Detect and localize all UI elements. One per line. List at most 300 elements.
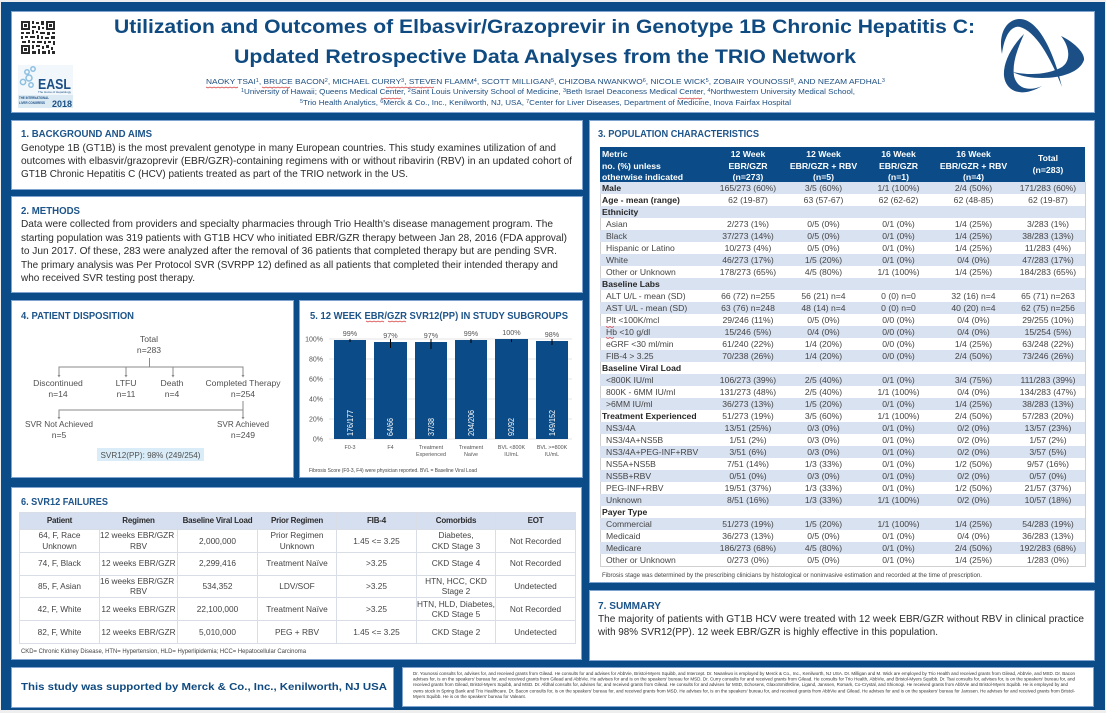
- table: population characteristics: 0/2 (0%): [957, 447, 990, 457]
- table: failures: Patient: [47, 516, 72, 525]
- panel: funding: [12, 668, 393, 707]
- table: population characteristics: 0/5 (0%): [807, 531, 840, 541]
- table: failures: CKD Stage 3: [432, 541, 480, 551]
- affiliations: 2: [408, 88, 411, 94]
- text: methods: who received SVR testing post therapy.: [20, 272, 195, 284]
- table: population characteristics: AST U/L - mean (SD): [606, 303, 687, 313]
- table: population characteristics: 0/4 (0%): [807, 327, 840, 337]
- bar chart: BVL >=800K: [537, 445, 568, 451]
- table: population characteristics: 0/5 (0%): [807, 243, 840, 253]
- table: failures: 2,299,416: [199, 558, 236, 568]
- table: population characteristics: 62 (19-87): [1028, 195, 1068, 205]
- panel: disclosures: [403, 668, 1093, 706]
- table: population characteristics: 192/283 (68%): [1020, 543, 1076, 553]
- table: population characteristics: 46/273 (17%): [722, 255, 774, 265]
- table: population characteristics: 1/5 (20%): [805, 399, 842, 409]
- bar chart: 92/92: [506, 418, 516, 436]
- heading: methods: 2. METHODS: [21, 205, 80, 217]
- table: failures: 534,352: [202, 581, 232, 591]
- table: population characteristics: 10/57 (18%): [1025, 495, 1071, 505]
- bar chart: 100%: [305, 336, 323, 344]
- flow diagram: LTFU: [116, 378, 136, 388]
- table: population characteristics: 1/1 (100%): [877, 267, 920, 277]
- table: population characteristics: 111/283 (39%): [1020, 375, 1076, 385]
- authors: , AND NEZAM AFDHAL: [794, 77, 882, 86]
- table: population characteristics: 0/1 (0%): [882, 435, 915, 445]
- table: population characteristics: 62 (62-62): [879, 195, 918, 205]
- table: population characteristics: 0/1 (0%): [882, 471, 915, 481]
- table: failures: Not Recorded: [510, 536, 561, 546]
- authors: , STEVEN FLAMM: [404, 77, 474, 86]
- table: population characteristics: 0/57 (0%): [1029, 471, 1067, 481]
- table: failures: HTN, HCC, CKD: [425, 576, 487, 586]
- table: population characteristics: 9/57 (16%): [1027, 459, 1069, 469]
- bar chart: 99%: [343, 329, 358, 338]
- table: failures: 12 weeks EBR/GZR: [101, 627, 176, 637]
- table: population characteristics: Asian: [606, 219, 628, 229]
- affiliations: 6: [380, 99, 383, 105]
- table: population characteristics: 1/1 (100%): [877, 183, 920, 193]
- table: population characteristics: 1/5 (20%): [805, 255, 842, 265]
- table: population characteristics: 51/273 (19%): [722, 519, 774, 529]
- authors: , CHIZOBA NWANKWO: [554, 77, 643, 86]
- table: population characteristics: 62 (75) n=256: [1021, 303, 1075, 313]
- table: population characteristics: 62 (48-85): [954, 195, 993, 205]
- chart footnote: Fibrosis Score (F0-3, F4) were physician reported. BVL = Baseline Viral Load: [309, 468, 477, 474]
- table: population characteristics: Black: [606, 231, 627, 241]
- table: population characteristics: 48 (14) n=4: [801, 303, 846, 313]
- heading: background and aims: 1. BACKGROUND AND AIMS: [21, 128, 152, 140]
- table: population characteristics: 2/4 (50%): [955, 411, 992, 421]
- table: population characteristics: 70/238 (26%): [722, 351, 774, 361]
- table: population characteristics: 37/273 (14%): [722, 231, 774, 241]
- authors: NAOKY TSAI: [206, 77, 251, 86]
- table: population characteristics: Hispanic or Latino: [606, 243, 675, 253]
- table: population characteristics: EBR/GZR + RBV: [940, 161, 1007, 171]
- bar chart: Experienced: [416, 452, 446, 458]
- flow diagram: n=11: [117, 389, 136, 399]
- table: population characteristics: 0/2 (0%): [957, 423, 990, 433]
- table: failures: CKD Stage 4: [432, 558, 480, 568]
- table: failures: Not Recorded: [510, 558, 561, 568]
- table: population characteristics: 38/283 (13%): [1022, 231, 1074, 241]
- table: population characteristics: 2/5 (40%): [805, 375, 842, 385]
- table: population characteristics: <800K IU/ml: [606, 375, 654, 385]
- bar chart: Naïve: [464, 452, 478, 458]
- table: population characteristics: PEG-INF+RBV: [606, 483, 664, 493]
- table: failures: Comorbids: [436, 516, 476, 525]
- bar chart: 149/152: [547, 410, 557, 436]
- table: population characteristics: 47/283 (17%): [1022, 255, 1074, 265]
- text: summary: The majority of patients with GT1B HCV were treated with 12 week EBR/GZR without RBV in clinical practice: [598, 613, 1084, 625]
- table: population characteristics: EBR/GZR: [879, 161, 918, 171]
- footnote: abbreviations: CKD= Chronic Kidney Disease, HTN= Hypertension, HLD= Hyperlipidemia; HCC= Hepatocellular Carcinoma: [21, 649, 307, 655]
- QR code: [21, 21, 55, 54]
- table: population characteristics: Commercial: [606, 519, 652, 529]
- table: population characteristics: 184/283 (65%): [1020, 267, 1076, 277]
- text: disclosures: advises for, is on the speakers' bureau for, and received grants from Gilead and AbbVie. He advises for and is on the speakers' bureau for MSD. Dr. Curry consults for and received grants from Gilead. He consults for Trio Health, AbbVie, and Bristol-Myers Squibb. Dr. Tsai consults for, advises for, is on the speakers' bureau for, and: [413, 676, 1075, 682]
- table: population characteristics: 0/4 (0%): [957, 315, 990, 325]
- table: failures: 64, F, Race: [39, 530, 80, 540]
- table: population characteristics: EBR/GZR: [728, 161, 768, 171]
- table: population characteristics: 3/57 (5%): [1029, 447, 1067, 457]
- table: population characteristics: 16 Week: [881, 149, 916, 159]
- bar chart: 0%: [313, 436, 323, 444]
- table: population characteristics: 0/1 (0%): [882, 423, 915, 433]
- heading: population characteristics: 3. POPULATION CHARACTERISTICS: [598, 128, 759, 140]
- table: population characteristics: 0/4 (0%): [957, 255, 990, 265]
- authors: 4: [474, 78, 477, 84]
- table: failures: Undetected: [514, 581, 557, 591]
- bar chart: 176/177: [345, 410, 355, 436]
- footnote: fibrosis stage: Fibrosis stage was determined by the prescribing clinicians by histological or noninvasive estimation and recorded at the time of prescription.: [602, 572, 982, 579]
- table: population characteristics: 0/3 (0%): [807, 471, 840, 481]
- table: population characteristics: 15/254 (5%): [1025, 327, 1071, 337]
- table: population characteristics: Treatment Experienced: [602, 411, 697, 421]
- bar chart: 100%: [502, 328, 521, 337]
- table: population characteristics: 63 (57-67): [804, 195, 843, 205]
- table: population characteristics: Hb <10 g/dl: [606, 327, 650, 337]
- table: population characteristics: Baseline Labs: [602, 279, 660, 289]
- table: population characteristics: 32 (16) n=4: [951, 291, 996, 301]
- authors: 5: [551, 78, 554, 84]
- table: failures: Unknown: [280, 541, 314, 551]
- table: population characteristics: 19/51 (37%): [725, 483, 771, 493]
- bar chart: F4: [387, 445, 394, 451]
- table: population characteristics: Medicare: [606, 543, 641, 553]
- table: population characteristics: 1/1 (100%): [877, 387, 920, 397]
- table: population characteristics: 1/4 (25%): [955, 267, 992, 277]
- table: population characteristics: Other or Unknown: [606, 267, 676, 277]
- table: population characteristics: 11/283 (4%): [1025, 243, 1071, 253]
- table: population characteristics: ALT U/L - mean (SD): [606, 291, 686, 301]
- table: failures: Prior Regimen: [270, 530, 324, 540]
- text: methods: to Jun 2017. Of these, 283 were analyzed after the removal of 36 patients that completed therapy but are pending SVR.: [21, 245, 557, 257]
- table: population characteristics: 0/1 (0%): [882, 531, 915, 541]
- affiliations: 5: [300, 99, 303, 105]
- bar chart: Treatment: [419, 445, 444, 451]
- table: population characteristics: 1/4 (25%): [955, 519, 992, 529]
- text: disclosures: [413, 671, 1075, 699]
- table: population characteristics: 73/246 (26%): [1022, 351, 1074, 361]
- table: failures: RBV: [130, 541, 147, 551]
- table: population characteristics: 36/273 (13%): [722, 531, 774, 541]
- flow diagram: Completed Therapy: [206, 378, 281, 388]
- table: population characteristics: 1/1 (100%): [877, 519, 920, 529]
- table: population characteristics: 0/0 (0%): [882, 339, 915, 349]
- table: failures: 12 weeks EBR/GZR: [101, 604, 176, 614]
- table: failures: >3.25: [366, 581, 387, 591]
- panel: SVR12 failures: [12, 488, 581, 659]
- flow diagram: Discontinued: [33, 378, 83, 388]
- table: failures: EOT: [528, 516, 543, 525]
- table: population characteristics: 131/273 (48%): [720, 387, 776, 397]
- table: population characteristics: 0/1 (0%): [882, 555, 915, 565]
- table: population characteristics: 7/51 (14%): [727, 459, 769, 469]
- text: background: Genotype 1B (GT1B) is the most prevalent genotype in many European countries. This study examines utilization of and: [21, 142, 556, 154]
- table: population characteristics: 38/283 (13%): [1022, 399, 1074, 409]
- table: population characteristics: 61/240 (22%): [722, 339, 774, 349]
- table: failures: CKD Stage 5: [432, 609, 480, 619]
- table: population characteristics: 0/1 (0%): [882, 483, 915, 493]
- table: population characteristics: 0/5 (0%): [807, 231, 840, 241]
- table: population characteristics: 0/1 (0%): [882, 255, 915, 265]
- table: failures: Diabetes,: [438, 530, 474, 540]
- table: population characteristics: 1/4 (25%): [955, 243, 992, 253]
- table: population characteristics: 0/3 (0%): [807, 423, 840, 433]
- bar chart: 64/66: [385, 418, 395, 436]
- table: population characteristics: 8/51 (16%): [727, 495, 769, 505]
- table: failures: HTN, HLD, Diabetes,: [417, 599, 495, 609]
- table: failures: FIB-4: [367, 516, 386, 525]
- table: population characteristics: 0/1 (0%): [882, 219, 915, 229]
- EASL logo: [18, 65, 73, 109]
- text: funding statement: This study was supported by Merck & Co., Inc., Kenilworth, NJ USA: [21, 681, 387, 693]
- bar chart: 60%: [309, 376, 323, 384]
- authors: [206, 77, 885, 86]
- table: population characteristics: 1/1 (100%): [877, 411, 920, 421]
- bar chart: 99%: [464, 329, 479, 338]
- text: methods: Data were collected from providers and specialty pharmacies through Trio Health's disease management program. The: [21, 218, 553, 230]
- affiliations: Trio Health Analytics,: [303, 98, 380, 107]
- table: failures: 1.45 <= 3.25: [353, 627, 400, 637]
- table: population characteristics: 10/273 (4%): [725, 243, 771, 253]
- panel: population characteristics: [590, 121, 1094, 582]
- table: population characteristics: 3/5 (60%): [805, 411, 842, 421]
- table: population characteristics: Ethnicity: [602, 207, 638, 217]
- table: failures: Treatment Naïve: [266, 604, 328, 614]
- table: population characteristics: 0/3 (0%): [807, 435, 840, 445]
- affiliations: Beth Israel Deaconess Medical Center,: [566, 87, 707, 96]
- table: population characteristics: NS3/4A+PEG-INF+RBV: [606, 447, 698, 457]
- authors: 3: [882, 78, 885, 84]
- affiliations: 7: [526, 99, 529, 105]
- table: failures: 82, F, White: [38, 627, 81, 637]
- table: population characteristics: 63 (76) n=248: [721, 303, 775, 313]
- title: Updated Retrospective Data Analyses from the TRIO Network: [234, 47, 856, 68]
- table: population characteristics: 56 (21) n=4: [801, 291, 846, 301]
- EASL logo: The Home of Hepatology: [38, 90, 71, 94]
- table: population characteristics: 0/4 (0%): [957, 387, 990, 397]
- table: population characteristics: 36/273 (13%): [722, 399, 774, 409]
- table: failures: Not Recorded: [510, 604, 561, 614]
- table: population characteristics: 1/3 (33%): [805, 459, 842, 469]
- table: failures: CKD Stage 2: [432, 627, 480, 637]
- table: population characteristics: FIB-4 > 3.25: [606, 351, 654, 361]
- table: population characteristics: (n=4): [963, 172, 984, 182]
- table: population characteristics: 2/4 (50%): [955, 183, 992, 193]
- text: disclosures: received grants from Gilead, Bristol-Myers Squibb, and MSD. Dr. Afdhal consults for, advises for, and received grants from Gilead. He consults for and advises for MSD, Echosens, GlaxoSmithKline, Ligand, Janssen, Romark, Co-Crystal, and Shionogi. He received grants from AbbVie and Bristol-Myers Squibb. He is employed by and: [413, 682, 1068, 687]
- table: population characteristics: 65 (71) n=263: [1021, 291, 1075, 301]
- table: population characteristics: 3/51 (6%): [729, 447, 767, 457]
- panel: patient disposition: [12, 301, 293, 477]
- affiliations: 1: [241, 88, 244, 94]
- table: population characteristics: Other or Unknown: [606, 555, 676, 565]
- table: population characteristics: 0/1 (0%): [882, 447, 915, 457]
- table: population characteristics: 2/4 (50%): [955, 351, 992, 361]
- table: population characteristics: 1/283 (0%): [1027, 555, 1069, 565]
- authors: 3: [401, 78, 404, 84]
- flow diagram: Death: [161, 378, 184, 388]
- text: methods: starting population was 319 patients with GT1B HCV who initiated EBR/GZR therapy between Jan 28, 2016 (FDA approval): [21, 232, 567, 244]
- table: population characteristics: 0/0 (0%): [882, 351, 915, 361]
- bar chart: [305, 328, 572, 458]
- title: Utilization and Outcomes of Elbasvir/Grazoprevir in Genotype 1B Chronic Hepatitis C:: [114, 17, 975, 38]
- table: population characteristics: 165/273 (60%): [720, 183, 776, 193]
- table: population characteristics: 13/57 (23%): [1025, 423, 1071, 433]
- table: failures: Stage 2: [442, 586, 470, 596]
- affiliations: [241, 87, 855, 107]
- table: population characteristics: 1/4 (25%): [955, 399, 992, 409]
- bar chart: 80%: [309, 356, 323, 364]
- affiliations: 3: [563, 88, 566, 94]
- text: methods: [20, 218, 567, 284]
- table: population characteristics: eGRF <30 ml/min: [606, 339, 674, 349]
- table: failures: Unknown: [42, 541, 77, 551]
- table: failures: 1.45 <= 3.25: [353, 536, 400, 546]
- affiliations: Merck & Co., Inc., Kenilworth, NJ, USA,: [383, 98, 526, 107]
- table: population characteristics: 15/246 (5%): [725, 327, 771, 337]
- text: background: GT1B Chronic Hepatitis C (HCV) patients treated as part of the TRIO network in the US.: [21, 168, 408, 180]
- table: failures: 12 weeks EBR/GZR: [101, 558, 176, 568]
- table: population characteristics: 1/51 (2%): [729, 435, 767, 445]
- table: population characteristics: 800K - 6MM IU/ml: [606, 387, 675, 397]
- bar chart: 204/206: [466, 410, 476, 436]
- table: failures: Treatment Naïve: [266, 558, 328, 568]
- table: population characteristics: 0/5 (0%): [807, 219, 840, 229]
- table: population characteristics: 4/5 (80%): [805, 267, 842, 277]
- bar chart: F0-3: [344, 445, 356, 451]
- bar chart: 20%: [309, 416, 323, 424]
- table: population characteristics: no. (%) unless: [602, 161, 661, 171]
- text: background: [21, 142, 572, 180]
- affiliations: Center for Liver Diseases, Department of Medicine, Inova Fairfax Hospital: [529, 98, 791, 107]
- flow diagram: [25, 334, 281, 440]
- table: population characteristics: 40 (20) n=4: [951, 303, 996, 313]
- table: population characteristics: 1/1 (100%): [877, 495, 920, 505]
- table: population characteristics: 54/283 (19%): [1022, 519, 1074, 529]
- table: population characteristics: 178/273 (65%): [720, 267, 776, 277]
- table: population characteristics: 106/273 (39%): [720, 375, 776, 385]
- table: population characteristics: 186/273 (68%): [720, 543, 776, 553]
- flow diagram: n=14: [48, 389, 68, 399]
- table: population characteristics: 13/51 (25%): [725, 423, 771, 433]
- table: population characteristics: 3/4 (75%): [955, 375, 992, 385]
- table: population characteristics: Plt <100K/mcl: [606, 315, 659, 325]
- table: population characteristics: 1/4 (25%): [955, 231, 992, 241]
- bar chart: 98%: [545, 330, 560, 339]
- table: population characteristics: 1/4 (25%): [955, 339, 992, 349]
- table: population characteristics: (n=273): [733, 172, 763, 182]
- table: population characteristics: 66 (72) n=255: [721, 291, 775, 301]
- table: population characteristics: 3/5 (60%): [805, 183, 842, 193]
- table: population characteristics: Baseline Viral Load: [602, 363, 681, 373]
- bar chart: 40%: [309, 396, 323, 404]
- table: population characteristics: White: [606, 255, 628, 265]
- table: population characteristics: 2/5 (40%): [805, 387, 842, 397]
- flow diagram: n=283: [137, 345, 161, 355]
- bar chart: 97%: [383, 331, 398, 340]
- table: population characteristics: 63/248 (22%): [1022, 339, 1074, 349]
- table: failures: 22,100,000: [197, 604, 238, 614]
- flow diagram: n=249: [231, 430, 255, 440]
- heading: patient disposition: 4. PATIENT DISPOSITION: [21, 310, 134, 322]
- table: population characteristics: 1/4 (20%): [805, 339, 842, 349]
- text: background: outcomes with elbasvir/grazoprevir (EBR/GZR)-containing regimens with or without ribavirin (RBV) in an updated cohort of: [21, 155, 572, 167]
- heading: failures: 6. SVR12 FAILURES: [21, 496, 108, 508]
- table: population characteristics: 29/255 (10%): [1022, 315, 1074, 325]
- table: population characteristics: Payer Type: [602, 507, 647, 517]
- table: failures: >3.25: [366, 604, 387, 614]
- callout: SVR12 result: SVR12(PP): 98% (249/254): [100, 450, 201, 460]
- table: population characteristics: 171/283 (60%): [1020, 183, 1076, 193]
- authors: , ZOBAIR YOUNOSSI: [709, 77, 791, 86]
- table: population characteristics: 1/3 (33%): [805, 495, 842, 505]
- table: population characteristics: 0/2 (0%): [957, 495, 990, 505]
- panel: summary: [590, 591, 1094, 660]
- table: population characteristics: 0/1 (0%): [882, 543, 915, 553]
- table: population characteristics: 51/273 (19%): [722, 411, 774, 421]
- authors: , SCOTT MILLIGAN: [477, 77, 551, 86]
- table: failures: Regimen: [122, 516, 155, 525]
- table: failures: Prior Regimen: [271, 516, 323, 525]
- table: population characteristics: 0 (0) n=0: [881, 303, 916, 313]
- table: population characteristics: 16 Week: [956, 149, 991, 159]
- flow diagram: n=5: [52, 430, 67, 440]
- table: population characteristics: 2/4 (50%): [955, 543, 992, 553]
- table: population characteristics: 0/5 (0%): [807, 555, 840, 565]
- affiliations: Northwestern University Medical School,: [710, 87, 855, 96]
- table: population characteristics: Metric: [602, 149, 628, 159]
- table: population characteristics: 0 (0) n=0: [881, 291, 916, 301]
- table: population characteristics: 57/283 (20%): [1022, 411, 1074, 421]
- table: population characteristics: Medicaid: [606, 531, 640, 541]
- table: population characteristics: 0/273 (0%): [727, 555, 769, 565]
- table: population characteristics: NS5A+NS5B: [606, 459, 656, 469]
- panel: methods: [12, 197, 582, 292]
- table: population characteristics: [600, 147, 1085, 565]
- text: methods: The primary analysis was Per Protocol SVR (SVRPP 12) defined as all patients that completed their intended therapy and: [21, 259, 558, 271]
- table: population characteristics: 0/5 (0%): [807, 315, 840, 325]
- table: population characteristics: (n=1): [888, 172, 909, 182]
- table: population characteristics: 62 (19-87): [728, 195, 768, 205]
- table: failures: RBV: [130, 586, 147, 596]
- table: failures: 2,000,000: [199, 536, 236, 546]
- table: population characteristics: 0/4 (0%): [957, 531, 990, 541]
- table: population characteristics: 21/57 (37%): [1025, 483, 1071, 493]
- table: failures: 85, F, Asian: [38, 581, 81, 591]
- affiliations: Saint Louis University School of Medicine,: [411, 87, 563, 96]
- table: population characteristics: 12 Week: [731, 149, 765, 159]
- table: population characteristics: 1/3 (33%): [805, 483, 842, 493]
- table: population characteristics: NS5B+RBV: [606, 471, 651, 481]
- EASL logo: LIVER CONGRESS: [19, 101, 45, 105]
- table: population characteristics: 0/1 (0%): [882, 459, 915, 469]
- table: population characteristics: 0/4 (0%): [957, 327, 990, 337]
- EASL logo: EASL: [38, 76, 71, 93]
- authors: , MICHAEL CURRY: [328, 77, 401, 86]
- table: failures: Undetected: [514, 627, 557, 637]
- authors: , NICOLE WICK: [646, 77, 706, 86]
- flow diagram: Total: [140, 334, 158, 344]
- table: population characteristics: 0/2 (0%): [957, 435, 990, 445]
- header panel: [12, 12, 1094, 112]
- table: population characteristics: 1/2 (50%): [955, 459, 992, 469]
- panel: SVR12 by study subgroups: [300, 301, 582, 477]
- bar chart: BVL <800K: [498, 445, 526, 451]
- flow diagram: SVR Achieved: [217, 419, 269, 429]
- table: failures: Baseline Viral Load: [183, 516, 252, 525]
